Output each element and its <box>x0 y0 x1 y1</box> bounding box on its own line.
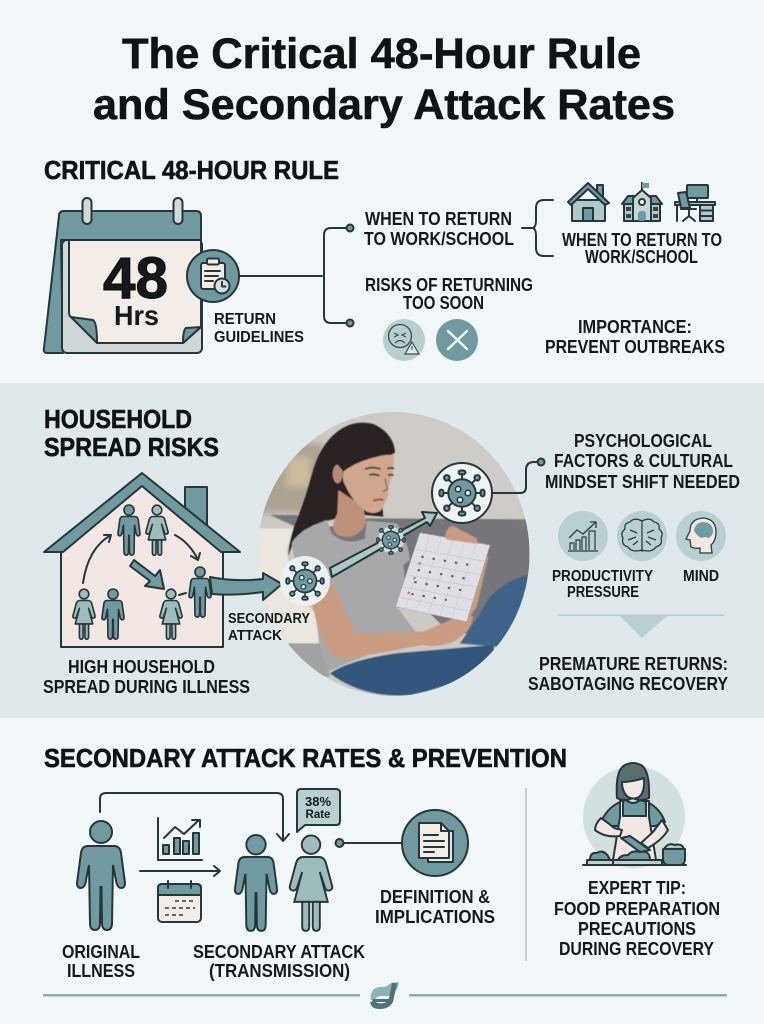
icon: mini calendar <box>158 881 201 922</box>
text: definition and implications <box>375 886 495 927</box>
icon: original person <box>77 821 125 930</box>
label: original illness: ILLNESS <box>67 960 135 981</box>
title <box>93 30 675 129</box>
heading: critical 48-hour rule: CRITICAL 48-HOUR RULE <box>44 155 339 185</box>
icon: virus low <box>280 556 330 606</box>
panel: household spread risks <box>0 383 764 718</box>
title: and Secondary Attack Rates <box>93 81 675 129</box>
connector: virus to text <box>492 458 544 493</box>
label: secondary attack: ATTACK <box>228 628 282 644</box>
text: psychological factors: MINDSET SHIFT NEEDED <box>545 471 740 492</box>
text: expert tip: FOOD PREPARATION <box>554 898 720 919</box>
text: when to return to work/school <box>562 230 722 267</box>
text: expert tip: PRECAUTIONS <box>578 918 696 939</box>
icon: document <box>402 810 468 876</box>
heading: household spread risks: HOUSEHOLD <box>44 404 192 434</box>
icon: virus high <box>432 463 492 523</box>
text: risks of returning too soon <box>365 275 533 313</box>
icon: man secondary <box>235 835 277 931</box>
icon: calendar 48 hrs: 48 <box>103 246 168 311</box>
text: definition and implications: IMPLICATIONS <box>375 906 495 927</box>
title: The Critical 48-Hour Rule <box>122 30 641 78</box>
icon: house with people <box>44 473 240 647</box>
heading: household spread risks: SPREAD RISKS <box>44 432 219 462</box>
text: importance: PREVENT OUTBREAKS <box>545 336 725 357</box>
icon: head with brain <box>676 511 726 561</box>
label: secondary attack transmission: SECONDARY ATTACK <box>193 941 366 962</box>
text: importance <box>545 316 725 357</box>
photo: woman holding calendar on sofa <box>258 412 530 696</box>
label: secondary attack: SECONDARY <box>228 611 310 627</box>
icon: calendar 48 hrs: Hrs <box>114 300 159 331</box>
hand over calendar <box>445 526 478 544</box>
icon: desk and chair <box>675 185 715 221</box>
text: psychological factors <box>545 430 740 492</box>
heading: household spread risks <box>44 404 219 462</box>
label: return guidelines: GUIDELINES <box>214 329 304 346</box>
label: high household spread <box>43 656 250 697</box>
people in house <box>73 505 211 639</box>
icon: school <box>622 183 662 221</box>
text: importance: IMPORTANCE: <box>578 316 692 337</box>
calendar in hand <box>396 533 490 622</box>
labels: productivity pressure and mind: PRESSURE <box>567 584 639 601</box>
panel: secondary attack rates and prevention <box>44 743 720 981</box>
bracket <box>522 200 553 256</box>
labels: productivity pressure and mind: MIND <box>683 568 719 585</box>
label: return guidelines <box>214 311 304 346</box>
band background <box>0 383 764 718</box>
text: definition and implications: DEFINITION & <box>380 886 490 907</box>
callout: 38% rate: 38% <box>305 794 331 809</box>
text: when to return: WHEN TO RETURN <box>365 208 512 229</box>
callout: 38% rate: Rate <box>306 809 330 821</box>
connector: branching lines <box>240 224 354 326</box>
connector: to definition <box>336 839 402 847</box>
transmission arrows <box>83 535 200 595</box>
panel: critical 48-hour rule <box>44 155 725 361</box>
label: secondary attack <box>228 611 310 644</box>
labels: productivity pressure and mind: PRODUCTIVITY <box>552 568 653 585</box>
text: expert tip: DURING RECOVERY <box>559 938 715 959</box>
text: when to return <box>364 208 514 249</box>
icon: x mark <box>436 319 478 361</box>
text: risks of returning too soon: TOO SOON <box>403 293 484 313</box>
text: when to return: TO WORK/SCHOOL <box>364 228 514 249</box>
vertical divider <box>525 788 527 961</box>
icon: house <box>568 183 609 221</box>
labels: productivity pressure and mind <box>552 568 719 601</box>
text: expert tip: EXPERT TIP: <box>588 877 686 898</box>
label: high household spread: SPREAD DURING ILLNESS <box>43 676 250 697</box>
divider with down arrow <box>558 614 724 638</box>
text: psychological factors: PSYCHOLOGICAL <box>574 430 712 451</box>
label: secondary attack transmission: (TRANSMISSION) <box>209 960 350 981</box>
arrow: out of house <box>210 573 282 600</box>
icon: footer logo <box>370 982 399 1009</box>
text: expert tip <box>554 877 720 959</box>
callout: 38% rate <box>297 789 340 832</box>
text: premature returns: PREMATURE RETURNS: <box>539 653 728 674</box>
heading: secondary attack rates: SECONDARY ATTACK RATES & PREVENTION <box>44 743 567 773</box>
icon: woman secondary <box>290 835 332 931</box>
icon: mini bar chart <box>158 818 202 860</box>
icon: woman preparing food <box>583 763 686 868</box>
icon: virus mid <box>377 526 405 554</box>
icon: calendar 48 hrs <box>44 198 202 353</box>
icon: clipboard with clock <box>187 250 239 302</box>
footer rule <box>43 994 727 996</box>
label: secondary attack transmission <box>193 941 366 981</box>
arrow: transmission through photo <box>330 512 437 577</box>
icon: sick face with warning <box>383 319 425 361</box>
label: original illness: ORIGINAL <box>62 941 140 962</box>
text: premature returns: SABOTAGING RECOVERY <box>528 673 729 694</box>
label: high household spread: HIGH HOUSEHOLD <box>68 656 215 677</box>
label: original illness <box>62 941 140 981</box>
text: risks of returning too soon: RISKS OF RETURNING <box>365 275 533 295</box>
text: psychological factors: FACTORS & CULTURAL <box>554 450 733 471</box>
icon: productivity chart <box>558 511 608 561</box>
text: when to return to work/school: WORK/SCHOOL <box>585 247 698 267</box>
label: return guidelines: RETURN <box>214 311 276 328</box>
icon: brain <box>617 511 667 561</box>
text: when to return to work/school: WHEN TO RETURN TO <box>562 230 722 250</box>
arrow: time progression <box>140 866 220 876</box>
arrow: transmission path <box>100 793 289 841</box>
text: premature returns <box>528 653 729 694</box>
